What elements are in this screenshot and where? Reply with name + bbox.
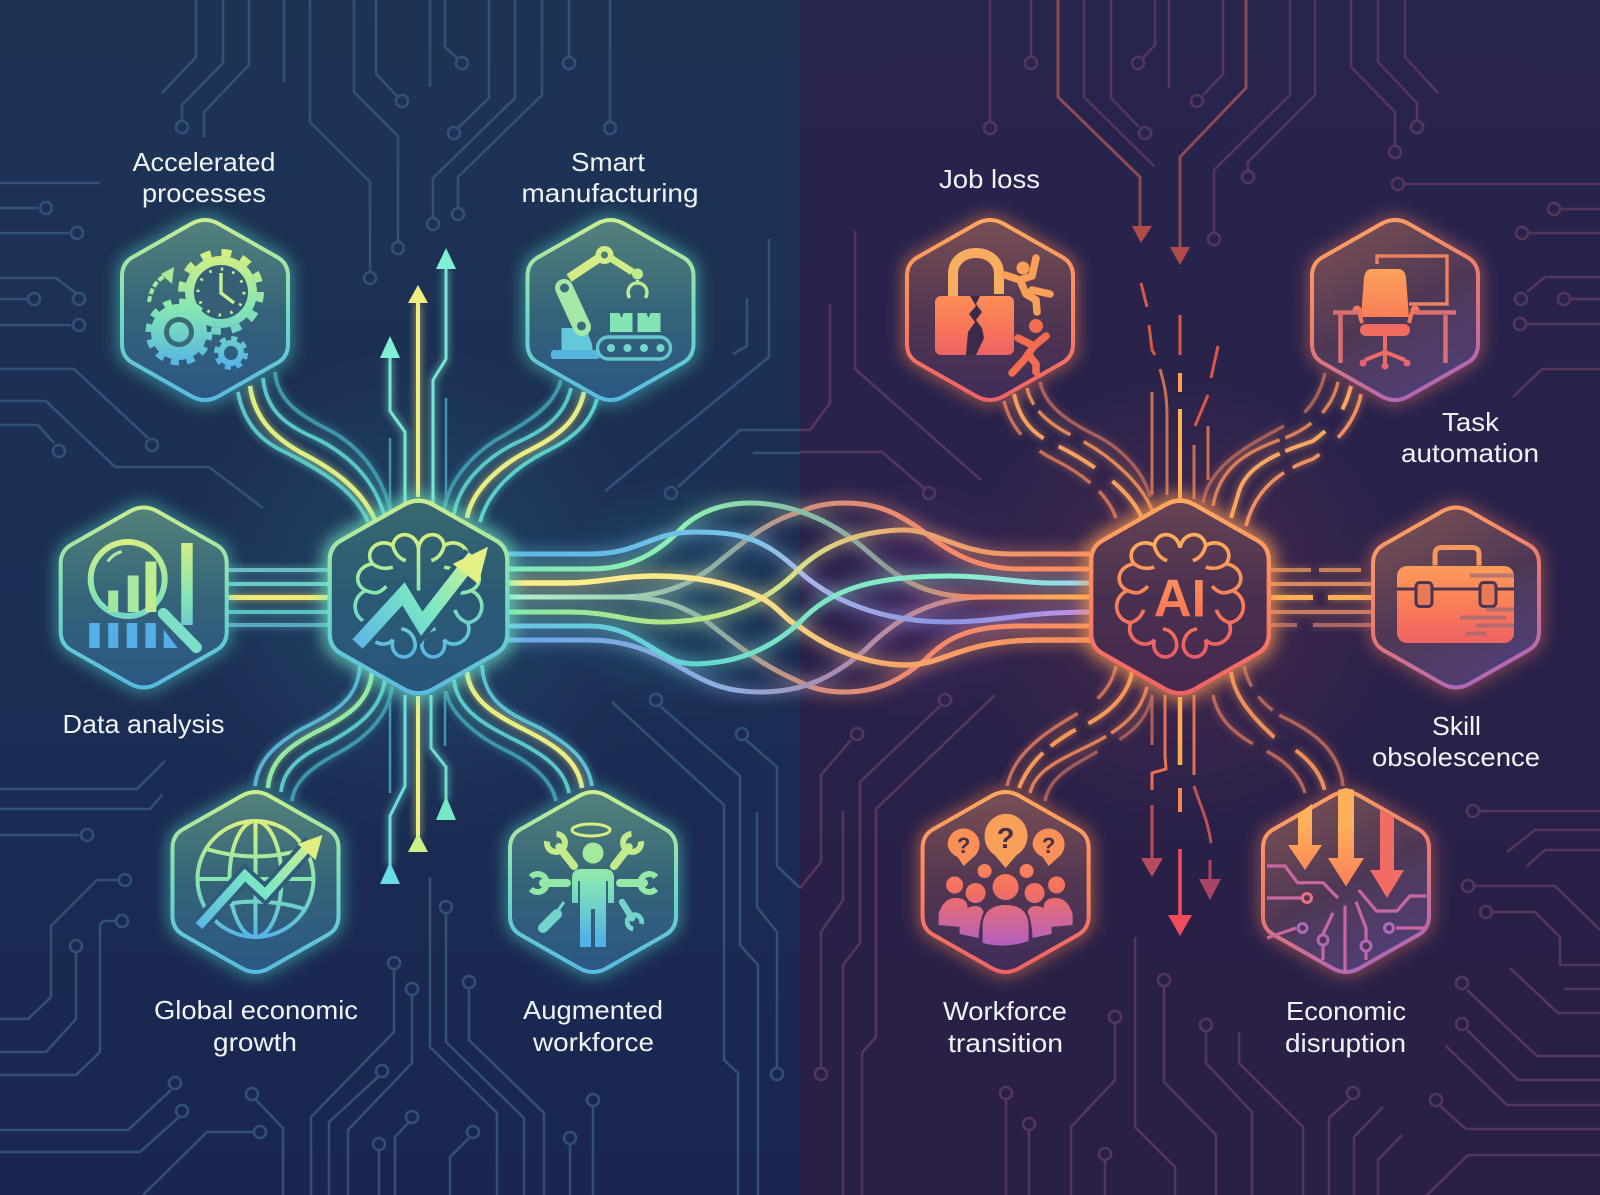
icon: brain [1117,535,1243,657]
icon: group of people [939,864,1073,946]
node: AI hub [1091,501,1269,693]
label: economic: Economic [1286,996,1406,1026]
icon: dissolving toolbox [1397,548,1514,643]
icon: robot arm and conveyor [551,246,670,359]
node: data analysis [61,508,227,688]
label: workforce: Workforce [943,996,1067,1026]
node: job loss [907,220,1073,400]
arrows: growth upward from left hub [380,248,456,506]
arrows: decline downward from top, broken trunk [1058,0,1246,499]
icon: curved arrow [149,267,174,302]
connectors: left hub to outer nodes [227,372,597,801]
icon: falling figure lower [1012,319,1046,373]
icon: broken padlock [935,253,1014,355]
background: right panel [800,0,1600,1195]
icon: question bubbles: ? [957,833,970,858]
connectors: right hub to outer nodes (broken) [1004,373,1372,801]
icon: clock gear [182,252,260,332]
circuit traces: left panel [0,0,800,1195]
label: automation: automation [1401,438,1539,468]
circuit traces: right panel [800,0,1600,1195]
node: workforce transition [923,792,1089,972]
icon: person with halo and tools [531,824,656,947]
background: left panel [0,0,800,1195]
icon: question bubbles [948,814,1065,868]
node: augmented workforce [510,792,676,972]
label: accelerated processes: Accelerated [132,147,276,177]
label line two: processes [142,178,266,208]
label: skill: Skill [1432,711,1481,741]
ambient glow: left hub [168,347,668,847]
icon: brain with rising arrow [355,535,488,657]
node: task automation [1312,220,1478,400]
label: job loss: Job loss [939,164,1040,194]
label: workforce: workforce [532,1027,654,1057]
node: smart manufacturing [528,220,694,400]
node: economic disruption [1263,788,1429,974]
weave: seven crossing strands between the hubs [508,503,1092,692]
node: global economic growth [172,792,338,972]
node: accelerated processes [122,220,288,400]
node: skill obsolescence [1373,508,1539,688]
label: smart: Smart [571,147,646,177]
arrows: growth downward from left hub [380,691,456,884]
ambient glow: right hub [950,367,1410,827]
icon: empty office chair and desk [1333,256,1456,370]
icon: small gear [216,338,246,368]
label: manufacturing: manufacturing [522,178,698,208]
label: transition: transition [948,1028,1063,1058]
label: augmented: Augmented [523,995,663,1025]
icon: question bubbles: ? [1042,833,1055,858]
label: growth: growth [213,1027,297,1057]
icon: magnifier over bar chart [89,542,196,648]
ambient glow: centre left [560,472,800,722]
icon: globe with rising arrow [198,821,322,937]
icon: falling arrows over circuit [1267,788,1426,974]
label: task: Task [1442,407,1500,437]
icon: question bubbles: ? [997,823,1014,855]
icon: falling figure upper [1005,258,1050,312]
label: disruption: disruption [1285,1028,1406,1058]
arrows: decline downward from AI hub [1141,695,1221,936]
icon: AI lettering: AI [1154,570,1206,628]
label: data analysis: Data analysis [62,709,224,739]
icon: medium gear [149,302,209,362]
ambient glow: centre right [800,472,1040,722]
node: left hub [330,501,507,693]
label: global economic: Global economic [154,995,358,1025]
label: obsolescence: obsolescence [1372,742,1540,772]
